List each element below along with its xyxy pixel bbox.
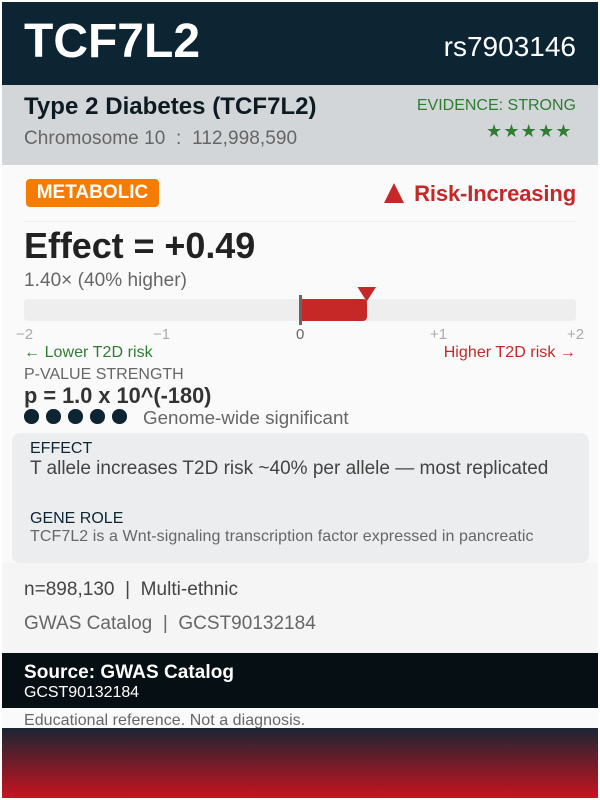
lower risk label: ← Lower T2D risk: [24, 344, 153, 361]
axis labels: −2: [16, 326, 33, 342]
sample size: n=898,130 | Multi-ethnic: [24, 578, 238, 600]
rsID: rs7903146: [444, 31, 576, 62]
effect scale: +1: [430, 326, 447, 342]
effect scale: +2: [567, 326, 584, 342]
info panel: [12, 433, 589, 563]
effect marker: [358, 287, 376, 302]
icon: up triangle: [384, 183, 404, 203]
source title: Source: GWAS Catalog: [24, 662, 234, 682]
risk label: Risk-Increasing: [414, 181, 576, 206]
gene role text: TCF7L2 is a Wnt-signaling transcription factor expressed in pancreatic: [30, 528, 534, 544]
scale track: [24, 299, 576, 321]
effect scale: 0: [296, 326, 304, 342]
odds ratio: 1.40× (40% higher): [24, 270, 187, 291]
effect bar: [301, 299, 367, 321]
header band: [2, 2, 598, 85]
source bar: [2, 653, 598, 708]
lower stats band: [2, 563, 598, 653]
evidence stars: ★★★★★: [486, 121, 573, 142]
gradient footer: [2, 728, 598, 798]
higher risk label: Higher T2D risk →: [444, 344, 576, 361]
zero tick: [299, 295, 302, 325]
chromosome position: Chromosome 10 : 112,998,590: [24, 128, 297, 149]
effect scale: [16, 287, 584, 342]
catalog ID: GWAS Catalog | GCST90132184: [24, 612, 316, 634]
evidence label: EVIDENCE: STRONG: [417, 97, 576, 114]
effect text: T allele increases T2D risk ~40% per allele — most replicated: [30, 458, 548, 479]
p-value heading: P-VALUE STRENGTH: [24, 366, 184, 382]
effect value: Effect = +0.49: [24, 224, 255, 266]
risk direction: [384, 181, 576, 206]
gene role heading: GENE ROLE: [30, 510, 123, 527]
category badge: [26, 179, 159, 207]
source ID: GCST90132184: [24, 684, 139, 701]
significance label: Genome-wide significant: [143, 407, 349, 428]
category badge: METABOLIC: [37, 182, 148, 203]
disclaimer: Educational reference. Not a diagnosis.: [24, 712, 305, 728]
effect scale: −1: [153, 326, 170, 342]
trait name: Type 2 Diabetes (TCF7L2): [24, 93, 317, 120]
subheader band: [2, 85, 598, 165]
significance dots: [24, 409, 127, 424]
effect heading: EFFECT: [30, 440, 92, 457]
gene title: TCF7L2: [24, 15, 200, 68]
p-value: p = 1.0 x 10^(-180): [24, 383, 211, 408]
